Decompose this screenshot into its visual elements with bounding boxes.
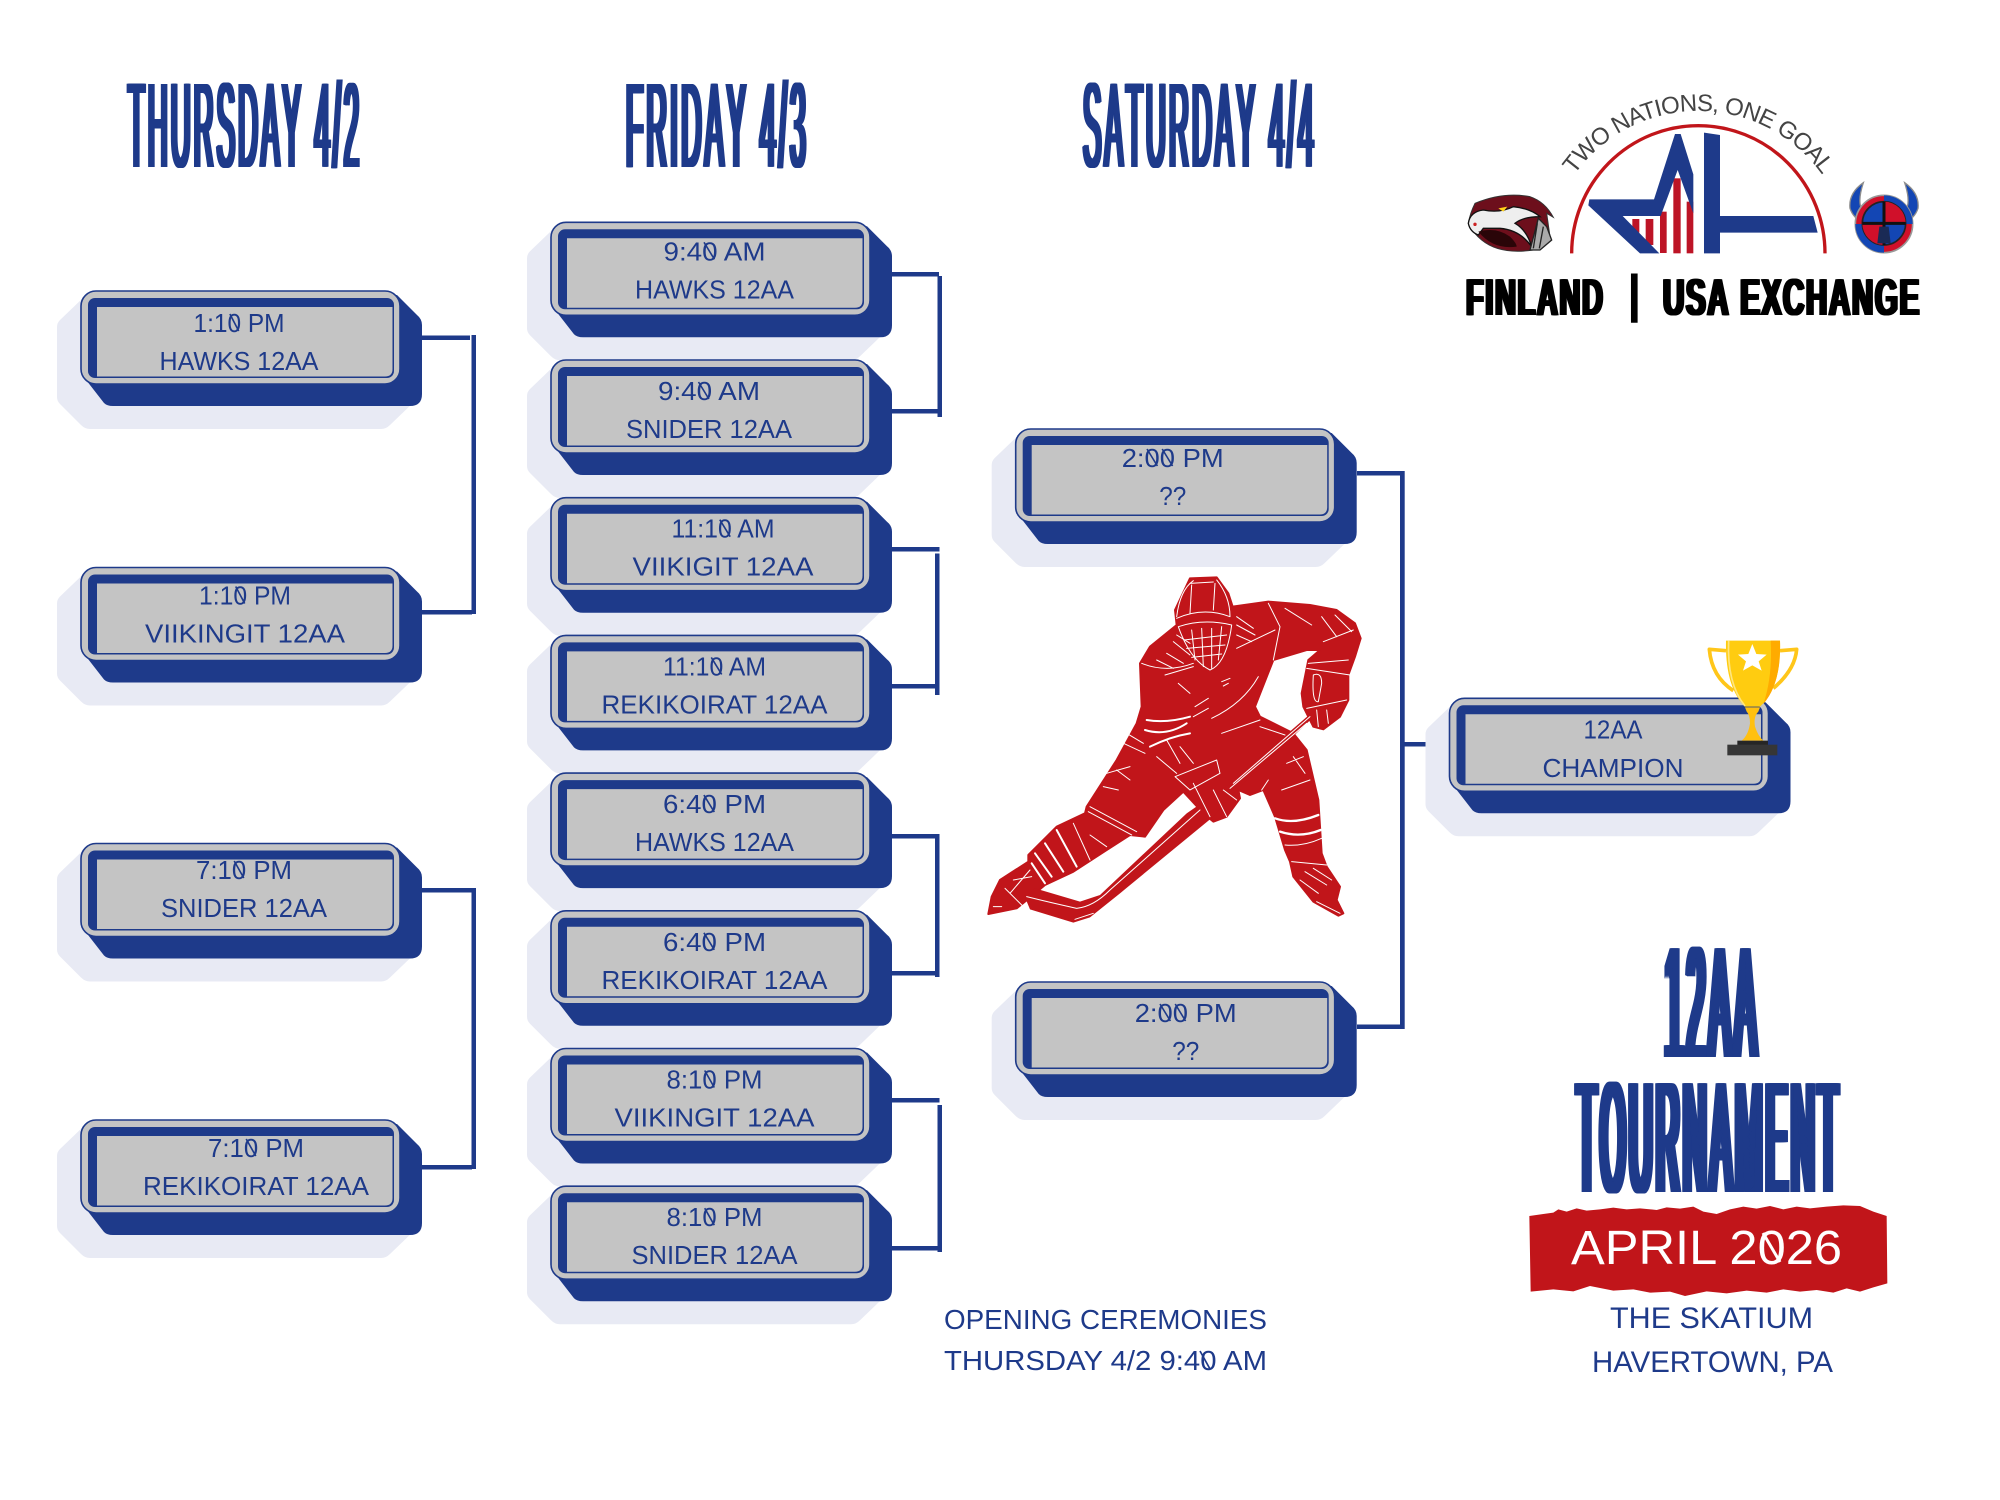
match box: Friday 8:10 PM Viikingit: VIIKINGIT 12AA	[614, 1102, 815, 1132]
icon: hawks team logo	[1468, 195, 1553, 251]
logo arc	[1572, 126, 1825, 253]
logo caption: Finland | USA Exchange: |	[1627, 265, 1642, 323]
match box: Friday 6:40 PM Hawks: 6:40 PM	[663, 789, 766, 819]
match box: Friday 11:10 AM Rekikoirat	[527, 635, 892, 773]
title: Tournament: TOURNAMENT	[1577, 1050, 1841, 1226]
match box: Saturday semifinal 1: 2:00 PM	[1122, 443, 1224, 473]
match box: Friday 8:10 PM Viikingit	[527, 1048, 892, 1186]
match box: Thursday 1:10 PM Hawks: HAWKS 12AA	[160, 346, 319, 376]
match box: Thursday 7:10 PM Snider	[57, 844, 422, 982]
match box: Friday 8:10 PM Viikingit: 8:10 PM	[666, 1064, 762, 1094]
logo caption: Finland | USA Exchange: USA EXCHANGE	[1663, 269, 1921, 327]
match box: Friday 11:10 AM Viikigit: 11:10 AM	[672, 514, 774, 544]
match box: Friday 8:10 PM Snider	[527, 1186, 892, 1324]
match box: Friday 9:40 AM Hawks	[527, 222, 892, 360]
match box: Friday 9:40 AM Hawks: 9:40 AM	[664, 236, 766, 266]
opening ceremonies note: OPENING CEREMONIES	[944, 1304, 1267, 1335]
match box: Friday 11:10 AM Rekikoirat: REKIKOIRAT 12AA	[602, 689, 828, 719]
icon: trophy	[1709, 641, 1797, 755]
match box: Friday 11:10 AM Viikigit	[527, 498, 892, 636]
red torn banner: April 2026	[1529, 1205, 1887, 1296]
match box: Friday 11:10 AM Viikigit: VIIKIGIT 12AA	[632, 552, 814, 582]
match box: Thursday 1:10 PM Viikingit	[57, 568, 422, 706]
match box: Friday 6:40 PM Hawks: HAWKS 12AA	[635, 827, 795, 857]
match box: Friday 8:10 PM Snider: 8:10 PM	[666, 1202, 762, 1232]
match box: Friday 6:40 PM Rekikoirat: 6:40 PM	[663, 927, 766, 957]
player illustration: hockey skater	[988, 577, 1361, 923]
icon: viikingit team logo	[1850, 183, 1918, 253]
match box: Saturday semifinal 2	[992, 982, 1357, 1120]
match box: Friday 9:40 AM Snider	[527, 360, 892, 498]
match box: Friday 8:10 PM Snider: SNIDER 12AA	[632, 1240, 798, 1270]
match box: Friday 6:40 PM Hawks	[527, 773, 892, 911]
match box: 12AA champion: 12AA	[1584, 714, 1643, 744]
venue text: THE SKATIUM	[1610, 1302, 1813, 1335]
match box: Friday 9:40 AM Snider: 9:40 AM	[658, 376, 760, 406]
bracket connectors: Thursday	[422, 335, 476, 1170]
logo flag stripes	[1632, 178, 1693, 253]
match box: 12AA champion: CHAMPION	[1542, 753, 1684, 783]
red torn banner: April 2026: APRIL 2026	[1571, 1222, 1842, 1275]
heading: Saturday: SATURDAY 4/4	[1083, 57, 1317, 193]
match box: Thursday 7:10 PM Snider: 7:10 PM	[196, 855, 292, 885]
logo star and L shape	[1588, 133, 1818, 253]
match box: Friday 6:40 PM Rekikoirat: REKIKOIRAT 12AA	[602, 965, 828, 995]
heading: Friday: FRIDAY 4/3	[626, 57, 809, 193]
logo: Two Nations One Goal	[1562, 94, 1830, 254]
match box: Thursday 1:10 PM Viikingit: 1:10 PM	[199, 580, 291, 610]
bracket connectors: Saturday to champion	[1357, 471, 1450, 1029]
match box: Thursday 7:10 PM Rekikoirat: 7:10 PM	[208, 1133, 304, 1163]
match box: Saturday semifinal 1	[992, 429, 1357, 567]
bracket connectors: Friday	[891, 272, 942, 1252]
match box: Friday 9:40 AM Snider: SNIDER 12AA	[626, 414, 793, 444]
match box: Saturday semifinal 2: 2:00 PM	[1135, 998, 1237, 1028]
venue text: HAVERTOWN, PA	[1592, 1346, 1833, 1379]
match box: Friday 9:40 AM Hawks: HAWKS 12AA	[635, 274, 795, 304]
logo slogan: TWO NATIONS, ONE GOAL	[1562, 94, 1830, 174]
match box: Saturday semifinal 2: ??	[1172, 1036, 1199, 1066]
logo caption: Finland | USA Exchange	[1466, 265, 1921, 327]
match box: Friday 11:10 AM Rekikoirat: 11:10 AM	[663, 651, 766, 681]
venue text	[1592, 1302, 1833, 1379]
match box: Saturday semifinal 1: ??	[1159, 481, 1186, 511]
match box: Thursday 7:10 PM Rekikoirat	[57, 1120, 422, 1258]
match box: Thursday 1:10 PM Viikingit: VIIKINGIT 12AA	[145, 618, 346, 648]
match box: Thursday 7:10 PM Rekikoirat: REKIKOIRAT 12AA	[143, 1171, 370, 1201]
match box: Thursday 1:10 PM Hawks: 1:10 PM	[194, 308, 284, 338]
title: 12AA: 12AA	[1664, 915, 1760, 1091]
logo caption: Finland | USA Exchange: FINLAND	[1466, 269, 1604, 327]
heading: Thursday: THURSDAY 4/2	[128, 57, 362, 193]
opening ceremonies note: THURSDAY 4/2 9:40 AM	[944, 1345, 1267, 1376]
match box: Thursday 7:10 PM Snider: SNIDER 12AA	[161, 893, 328, 923]
match box: 12AA champion	[1426, 698, 1790, 836]
match box: Thursday 1:10 PM Hawks	[57, 291, 422, 429]
opening ceremonies note	[944, 1304, 1267, 1376]
match box: Friday 6:40 PM Rekikoirat	[527, 911, 892, 1049]
